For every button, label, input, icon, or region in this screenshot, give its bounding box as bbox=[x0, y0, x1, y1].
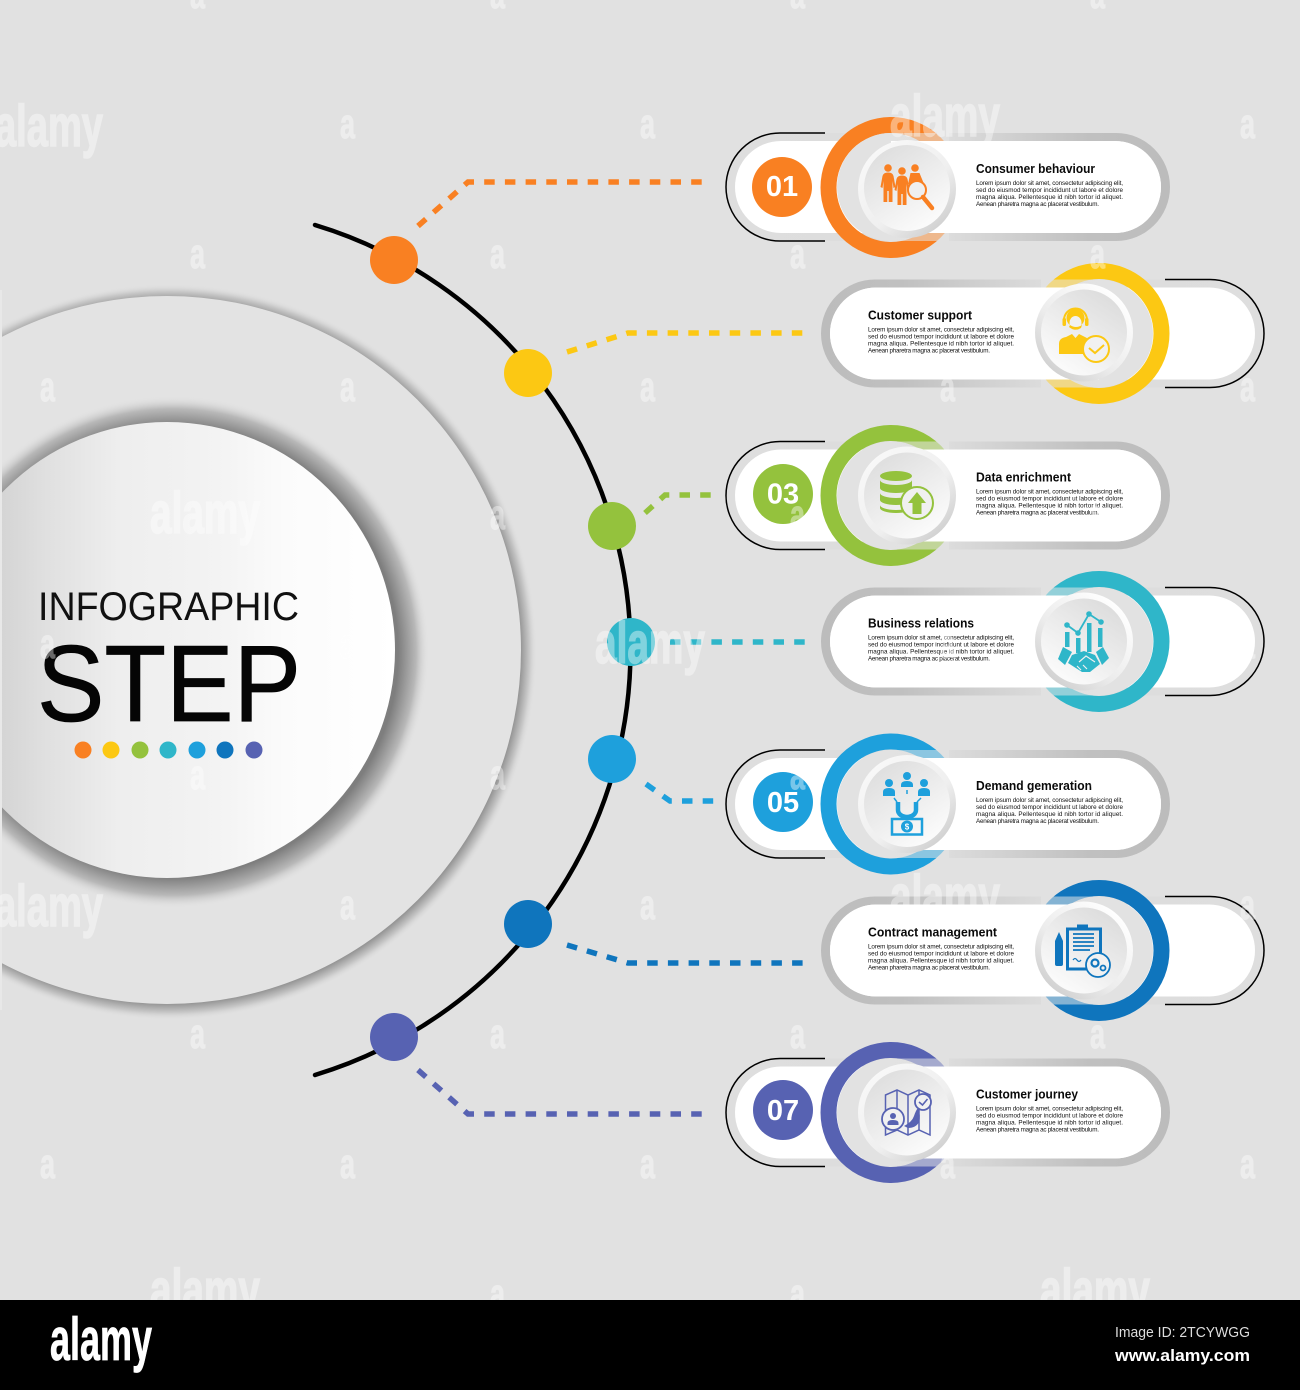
watermarks: a bbox=[640, 881, 655, 928]
text: data enrichment bbox=[976, 470, 1123, 516]
watermarks: a bbox=[190, 1010, 205, 1057]
text: business relations: sed do eiusmod tempor incididunt ut labore et dolore bbox=[868, 642, 1014, 648]
text: data enrichment: sed do eiusmod tempor incididunt ut labore et dolore bbox=[976, 496, 1123, 502]
icon: chart and handshake bbox=[1058, 611, 1109, 672]
number badge 05 bbox=[753, 772, 813, 832]
number badge 03 bbox=[753, 464, 813, 524]
panel: step 06 contract management bbox=[821, 888, 1265, 1013]
text: customer support bbox=[868, 308, 1014, 354]
text: demand gemeration: magna aliqua. Pellentesque id nibh tortor id aliquet. bbox=[976, 811, 1123, 818]
watermarks: a bbox=[1240, 100, 1255, 147]
text: demand gemeration: Aenean pharetra magna ac placerat vestibulum. bbox=[976, 818, 1099, 825]
text: contract management: Aenean pharetra magna ac placerat vestibulum. bbox=[868, 964, 990, 972]
text: contract management: sed do eiusmod tempor incididunt ut labore et dolore bbox=[868, 950, 1014, 958]
watermarks: a bbox=[40, 1140, 55, 1187]
watermarks: a bbox=[1090, 1010, 1105, 1057]
text: demand gemeration: Lorem ipsum dolor sit amet, consectetur adipiscing elit, bbox=[976, 797, 1123, 804]
heading: infographic step: INFOGRAPHIC bbox=[38, 585, 299, 629]
text: customer support: Customer support bbox=[868, 308, 973, 322]
text: data enrichment: Data enrichment bbox=[976, 470, 1072, 484]
text: business relations: Lorem ipsum dolor sit amet, consectetur adipiscing elit, bbox=[868, 634, 1014, 642]
text: data enrichment: Lorem ipsum dolor sit amet, consectetur adipiscing elit, bbox=[976, 488, 1123, 496]
text: consumer behaviour bbox=[976, 162, 1123, 208]
watermarks: a bbox=[1090, 491, 1105, 538]
icon: clipboard pencil gears bbox=[1055, 924, 1110, 977]
watermarks: alamy bbox=[890, 84, 1000, 149]
icon: people with magnifier bbox=[880, 164, 932, 208]
black timeline arc bbox=[315, 225, 631, 1075]
watermarks: a bbox=[190, 230, 205, 277]
text: consumer behaviour: Aenean pharetra magna ac placerat vestibulum. bbox=[976, 201, 1099, 208]
panel: step 07 customer journey bbox=[726, 1050, 1170, 1175]
text: demand gemeration: sed do eiusmod tempor incididunt ut labore et dolore bbox=[976, 804, 1123, 811]
watermarks: a bbox=[340, 363, 355, 410]
watermarks: alamy bbox=[595, 611, 705, 676]
number badge 07 bbox=[753, 1080, 813, 1140]
footer bar with logo and image id: www.alamy.com bbox=[1114, 1346, 1250, 1365]
footer bar with logo and image id: Image ID: 2TCYWGG bbox=[1115, 1324, 1250, 1341]
watermarks: a bbox=[640, 1140, 655, 1187]
dashed connectors bbox=[418, 182, 805, 1114]
watermarks: a bbox=[1240, 1140, 1255, 1187]
watermarks: a bbox=[640, 100, 655, 147]
watermarks: a bbox=[790, 491, 805, 538]
text: business relations bbox=[868, 616, 1014, 662]
watermarks: a bbox=[340, 881, 355, 928]
text: customer support: sed do eiusmod tempor incididunt ut labore et dolore bbox=[868, 334, 1014, 340]
icon: magnet attracting people to money: $ bbox=[905, 822, 910, 832]
text: customer support: magna aliqua. Pellentesque id nibh tortor id aliquet. bbox=[868, 340, 1014, 348]
watermarks: a bbox=[490, 230, 505, 277]
watermarks: a bbox=[940, 1140, 955, 1187]
number badge 05: 05 bbox=[767, 787, 799, 819]
watermarks: alamy bbox=[890, 864, 1000, 929]
icon: magnet attracting people to money bbox=[883, 772, 930, 834]
icon: support agent with check bbox=[1059, 308, 1109, 362]
number badge 01 bbox=[752, 157, 812, 217]
text: contract management bbox=[868, 926, 1014, 972]
footer bar with logo and image id: alamy bbox=[50, 1306, 152, 1373]
panel: step 05 demand generation bbox=[726, 742, 1170, 866]
watermarks: alamy bbox=[150, 481, 260, 546]
watermarks: a bbox=[340, 100, 355, 147]
watermarks: a bbox=[1090, 751, 1105, 798]
watermarks: a bbox=[640, 363, 655, 410]
watermarks: a bbox=[940, 620, 955, 667]
watermarks: a bbox=[790, 230, 805, 277]
text: customer journey: sed do eiusmod tempor incididunt ut labore et dolore bbox=[976, 1112, 1123, 1120]
watermarks: a bbox=[1240, 620, 1255, 667]
watermarks: alamy bbox=[1040, 1258, 1150, 1323]
heading: infographic step: STEP bbox=[37, 623, 301, 745]
watermarks: a bbox=[490, 1010, 505, 1057]
watermarks: a bbox=[40, 363, 55, 410]
number badge 07: 07 bbox=[767, 1095, 799, 1127]
footer bar with logo and image id bbox=[0, 1300, 1300, 1390]
text: consumer behaviour: sed do eiusmod tempor incididunt ut labore et dolore bbox=[976, 187, 1123, 194]
text: customer support: Lorem ipsum dolor sit amet, consectetur adipiscing elit, bbox=[868, 326, 1014, 334]
watermarks: a bbox=[340, 1140, 355, 1187]
watermarks: a bbox=[790, 751, 805, 798]
text: demand gemeration bbox=[976, 779, 1123, 825]
watermarks: alamy bbox=[150, 1258, 260, 1323]
text: customer support: Aenean pharetra magna ac placerat vestibulum. bbox=[868, 348, 990, 354]
watermarks: a bbox=[490, 1270, 505, 1317]
watermarks: a bbox=[1090, 230, 1105, 277]
text: customer journey: Aenean pharetra magna ac placerat vestibulum. bbox=[976, 1126, 1099, 1134]
watermarks: a bbox=[790, 1270, 805, 1317]
watermarks: a bbox=[490, 491, 505, 538]
icon: map with person and check bbox=[882, 1090, 931, 1135]
watermarks: a bbox=[940, 363, 955, 410]
text: customer journey: Lorem ipsum dolor sit amet, consectetur adipiscing elit, bbox=[976, 1106, 1123, 1112]
text: customer journey bbox=[976, 1088, 1123, 1134]
text: business relations: magna aliqua. Pellentesque id nibh tortor id aliquet. bbox=[868, 648, 1014, 656]
watermarks: a bbox=[1240, 881, 1255, 928]
panel: concentric central discs bbox=[0, 284, 537, 1020]
watermarks: a bbox=[340, 620, 355, 667]
panel: step 02 customer support bbox=[821, 271, 1265, 396]
text: customer journey: magna aliqua. Pellentesque id nibh tortor id aliquet. bbox=[976, 1120, 1123, 1126]
watermarks: a bbox=[1240, 363, 1255, 410]
text: consumer behaviour: Consumer behaviour bbox=[976, 162, 1095, 176]
panel: step 04 business relations bbox=[821, 579, 1265, 704]
text: consumer behaviour: magna aliqua. Pellentesque id nibh tortor id aliquet. bbox=[976, 194, 1123, 201]
number badge 01: 01 bbox=[766, 171, 798, 203]
watermarks: a bbox=[790, 1010, 805, 1057]
text: consumer behaviour: Lorem ipsum dolor sit amet, consectetur adipiscing elit, bbox=[976, 180, 1123, 187]
text: contract management: Lorem ipsum dolor sit amet, consectetur adipiscing elit, bbox=[868, 944, 1014, 950]
text: customer journey: Customer journey bbox=[976, 1088, 1078, 1102]
number badge 03: 03 bbox=[767, 478, 799, 510]
timeline nodes bbox=[370, 236, 655, 1061]
text: data enrichment: magna aliqua. Pellentesque id nibh tortor id aliquet. bbox=[976, 502, 1123, 510]
panel: step 01 consumer behaviour bbox=[726, 125, 1170, 250]
text: demand gemeration: Demand gemeration bbox=[976, 779, 1092, 793]
text: business relations: Aenean pharetra magna ac placerat vestibulum. bbox=[868, 656, 990, 662]
watermarks: a bbox=[490, 751, 505, 798]
text: contract management: Contract management bbox=[868, 926, 998, 940]
watermarks: a bbox=[190, 751, 205, 798]
colour dots row bbox=[74, 742, 262, 758]
text: business relations: Business relations bbox=[868, 616, 974, 630]
watermarks: a bbox=[40, 620, 55, 667]
text: data enrichment: Aenean pharetra magna ac placerat vestibulum. bbox=[976, 510, 1099, 516]
icon: database with up arrow bbox=[880, 471, 933, 519]
text: contract management: magna aliqua. Pellentesque id nibh tortor id aliquet. bbox=[868, 958, 1014, 964]
panel: step 03 data enrichment bbox=[726, 433, 1170, 558]
